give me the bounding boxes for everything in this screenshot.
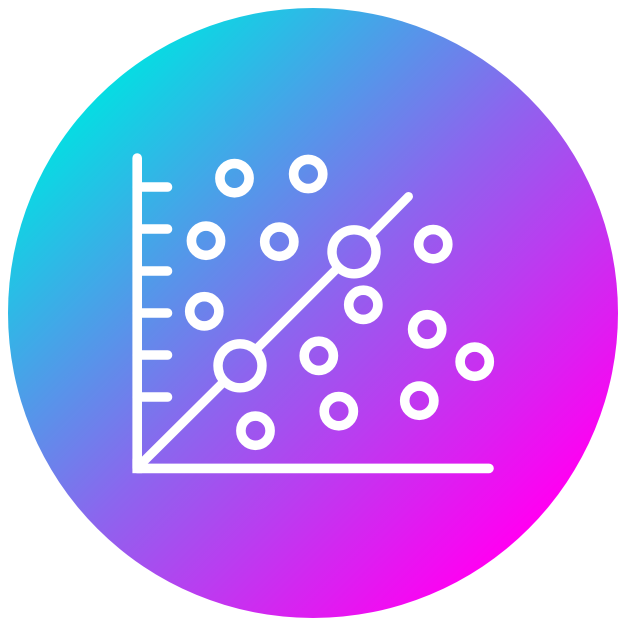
axes and ticks: [137, 158, 489, 468]
trend line: [139, 196, 408, 466]
scatter points: [190, 159, 489, 445]
trend line markers: [218, 230, 376, 388]
